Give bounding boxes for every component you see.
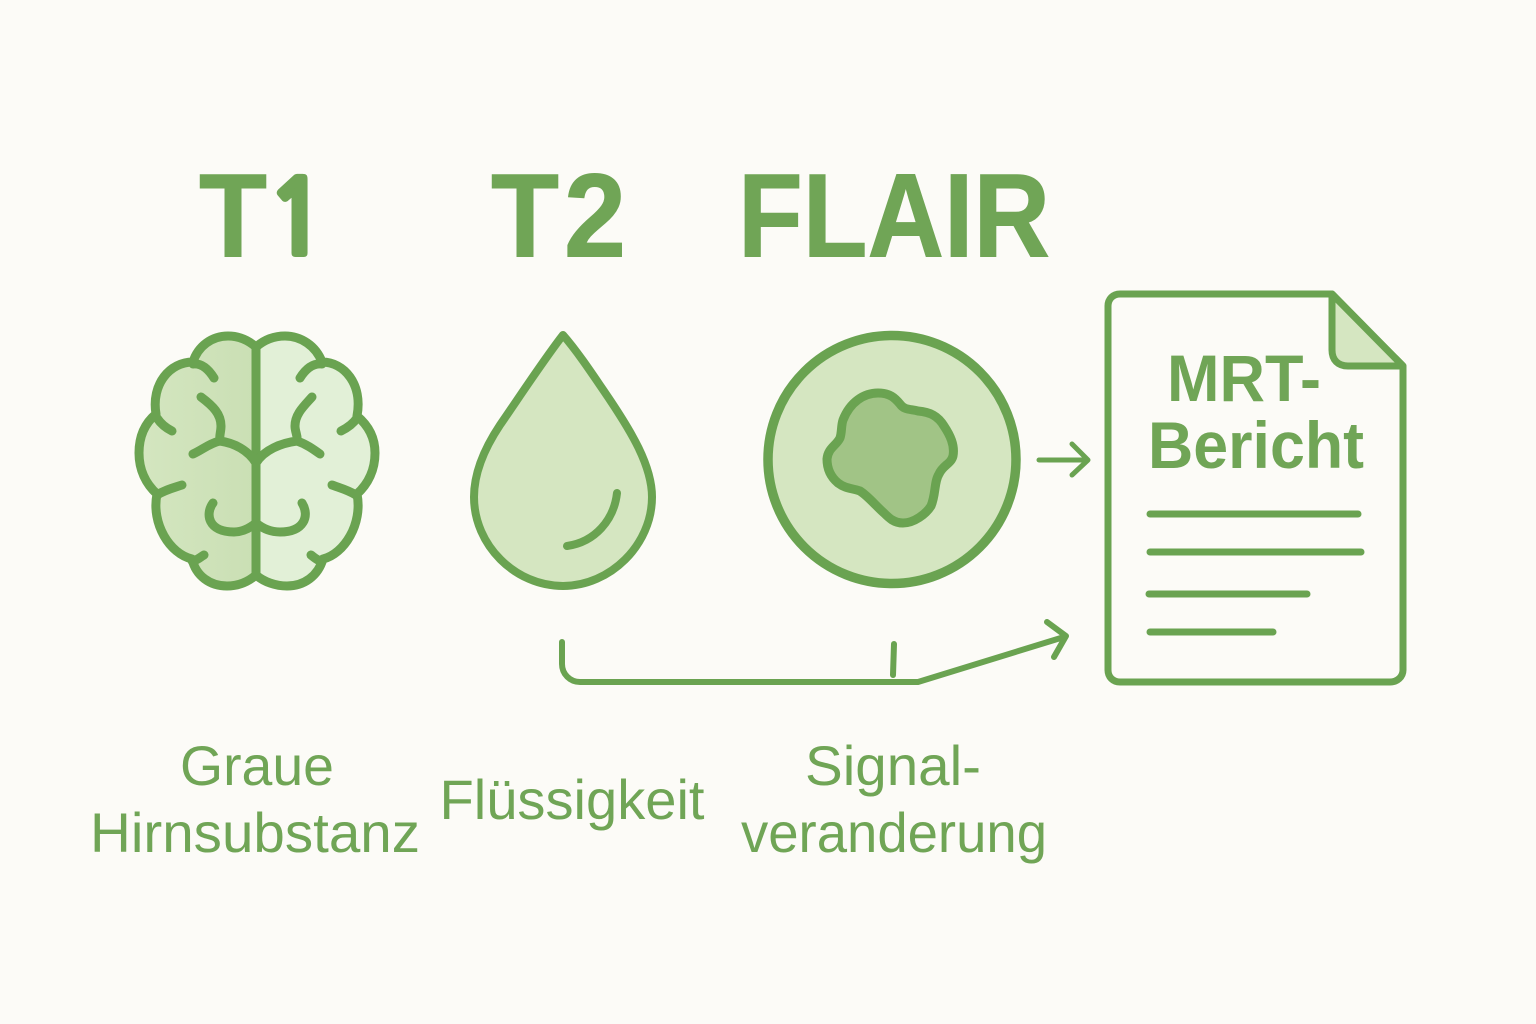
heading: T2: 2 xyxy=(564,150,626,282)
label: Signalveränderung xyxy=(741,734,1047,864)
heading: T1: 1 xyxy=(266,168,328,270)
heading: T2 xyxy=(491,150,626,282)
heading: T1: T xyxy=(199,150,267,282)
icon: water drop xyxy=(474,335,652,586)
label: Signalveränderung: Signal- xyxy=(805,734,981,797)
label: Flüssigkeit: Flüssigkeit xyxy=(440,768,705,831)
label: Graue Hirnsubstanz: Hirnsubstanz xyxy=(90,801,420,864)
heading: FLAIR: FLAIR xyxy=(738,150,1050,282)
label: Graue Hirnsubstanz xyxy=(90,734,420,864)
heading: T2: T xyxy=(491,150,559,282)
icon: lesion circle xyxy=(768,336,1016,584)
icon: brain xyxy=(139,336,375,586)
icon: report document xyxy=(1108,294,1403,682)
label: Graue Hirnsubstanz: Graue xyxy=(180,734,334,797)
arrow: bracket from T2 and FLAIR to report xyxy=(562,622,1066,682)
report text lines xyxy=(1149,514,1361,632)
icon: report document: Bericht xyxy=(1148,408,1364,482)
report title: MRT- xyxy=(1167,341,1321,415)
arrow: FLAIR to report xyxy=(1039,444,1088,475)
heading: T1 xyxy=(199,150,328,282)
label: Signalveränderung: veranderung xyxy=(741,801,1047,864)
